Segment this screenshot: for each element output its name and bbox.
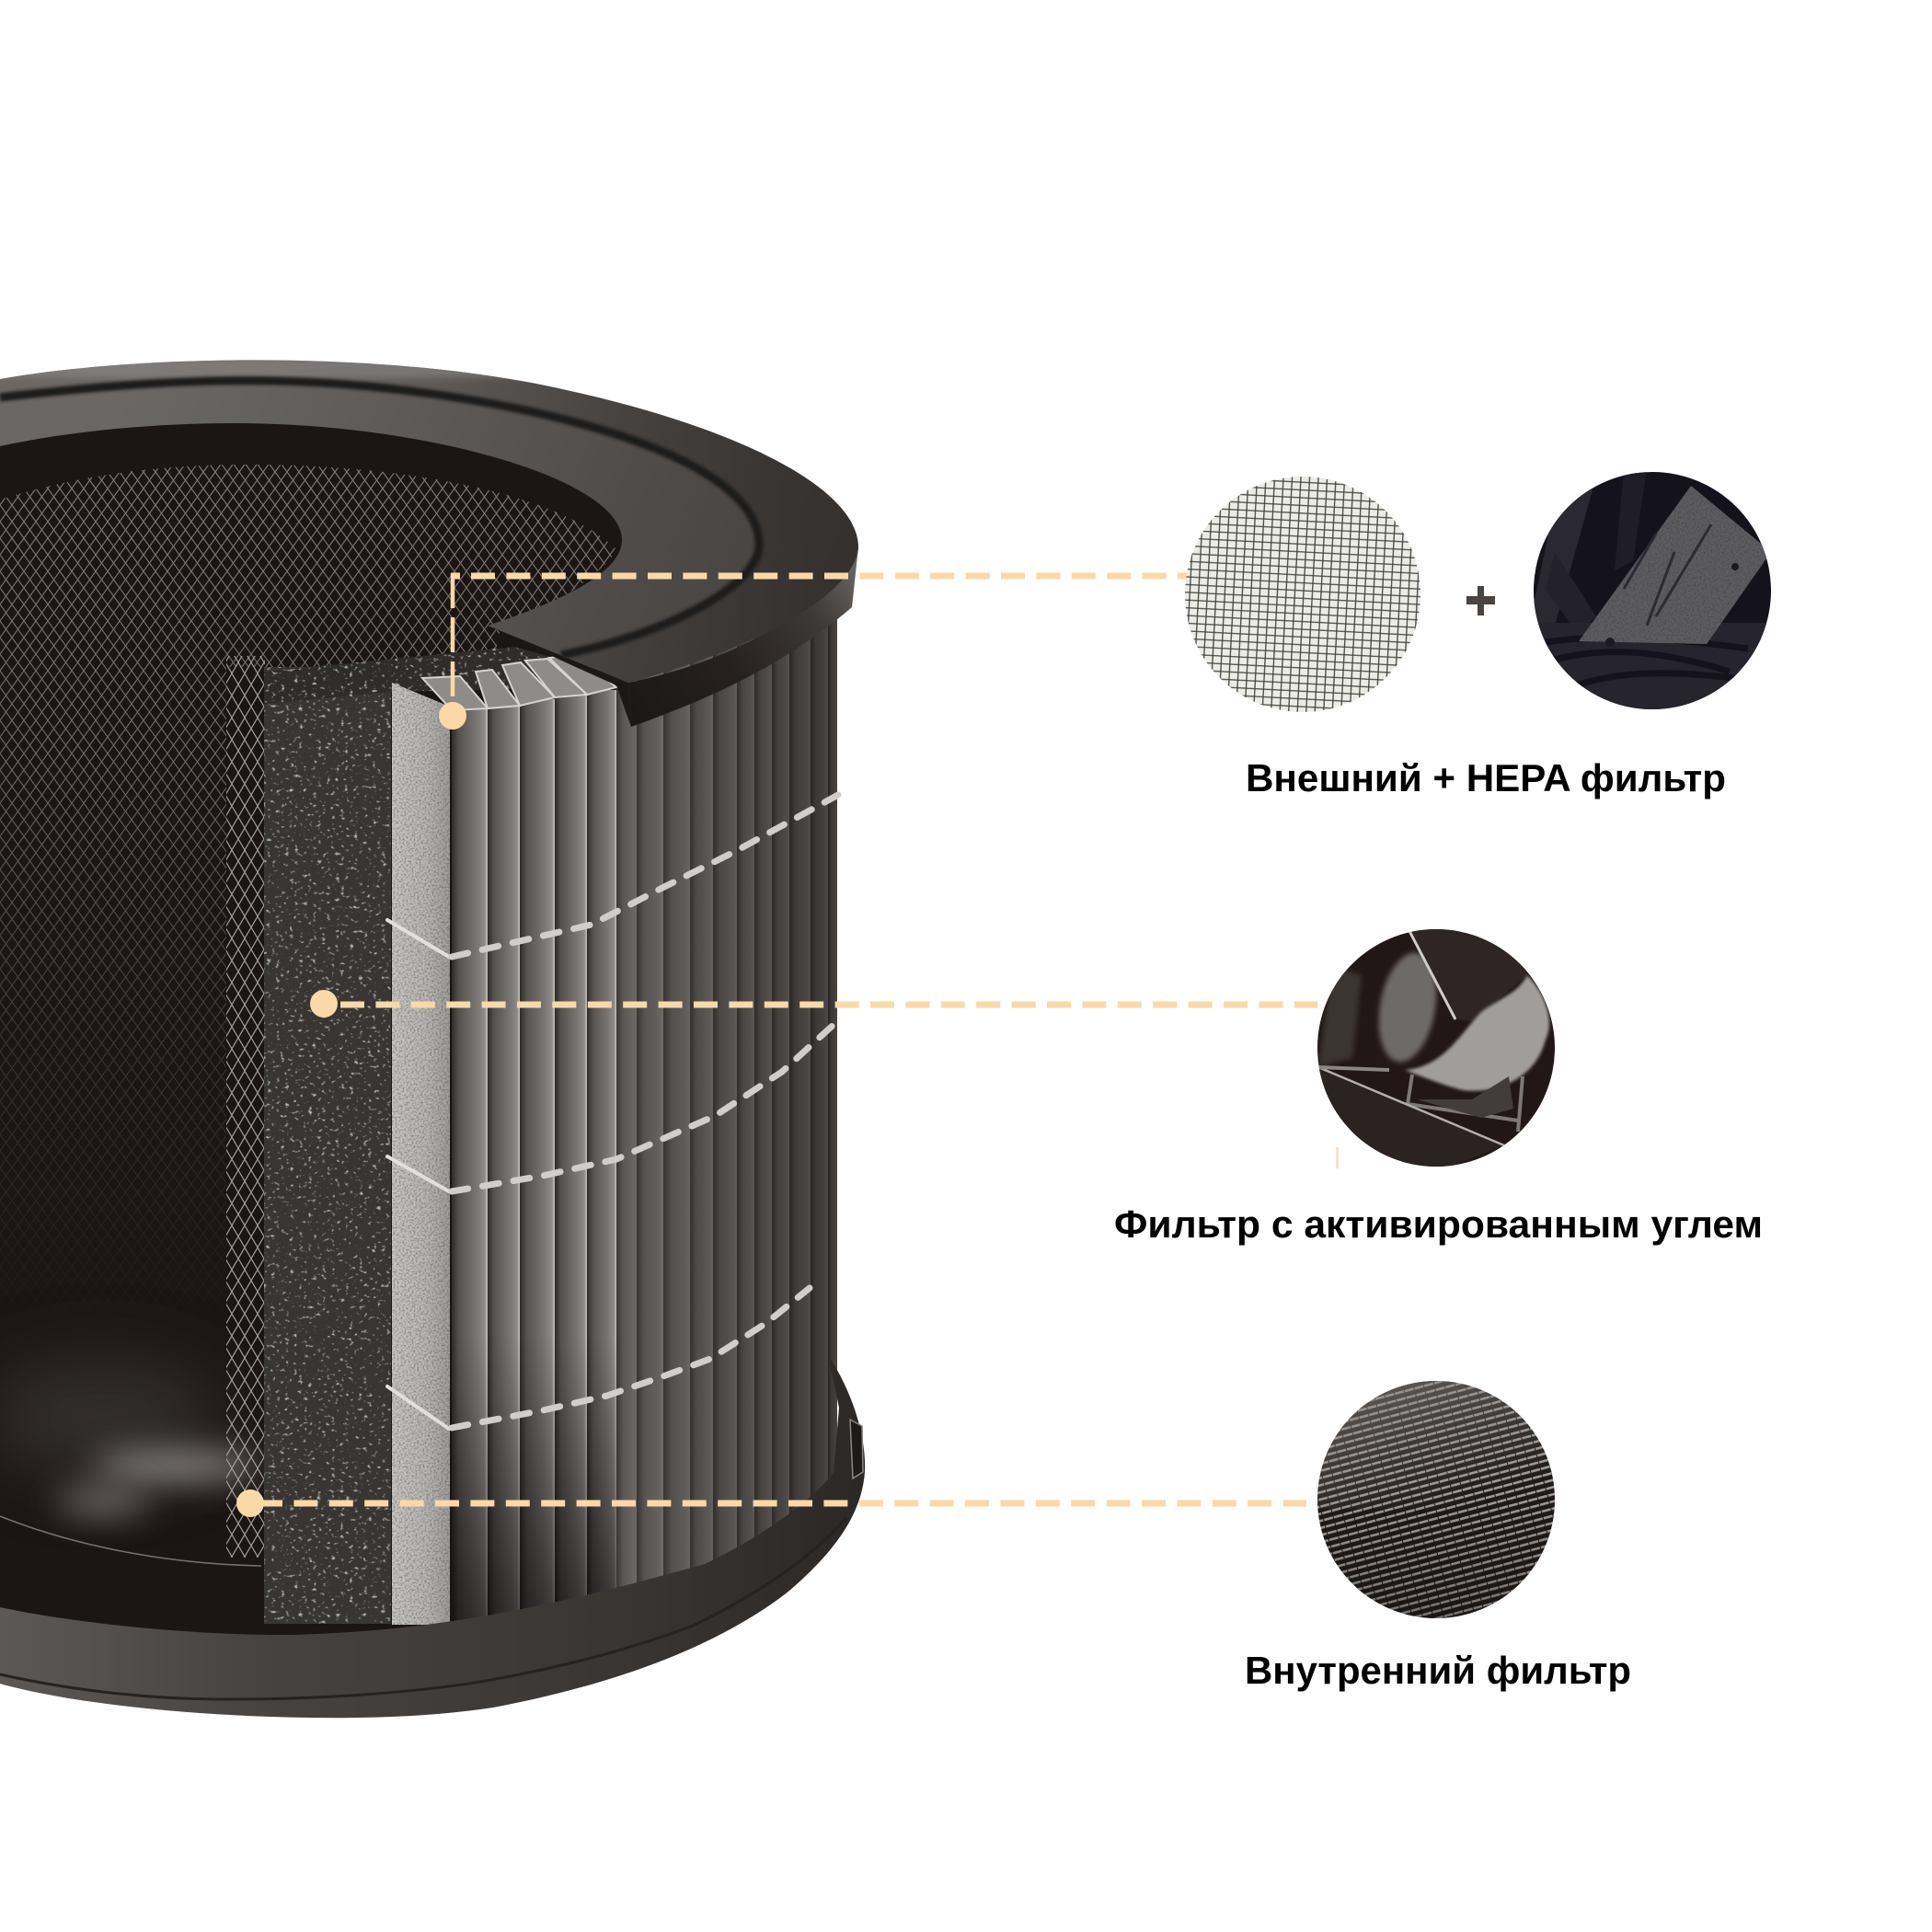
small stray tick [1336, 1147, 1339, 1168]
top cap side band [628, 547, 858, 727]
circle: inner filter swatch [1316, 1379, 1557, 1620]
pleat folds on top [422, 655, 616, 710]
bottom rim [0, 1355, 865, 1718]
callout line: activated carbon [310, 990, 1317, 1018]
label: outer + HEPA: Внешний + HEPA фильтр [1246, 756, 1726, 799]
top cap ring [0, 360, 858, 683]
cut face of the top cap [488, 626, 631, 727]
activated carbon foam layer [264, 647, 554, 1624]
callout line: inner filter [236, 1489, 1306, 1517]
rib threads [387, 795, 838, 1429]
outer pleats [616, 598, 837, 1638]
callout line: outer + HEPA [439, 573, 1187, 730]
plus sign [1466, 586, 1495, 615]
circle: HEPA fibres swatch [1534, 472, 1771, 709]
filter interior [0, 409, 635, 1638]
circle: outer mesh swatch [1185, 477, 1420, 712]
HEPA pleats section [422, 655, 616, 1633]
circle: activated carbon swatch [1316, 925, 1557, 1173]
label: inner filter: Внутренний фильтр [1245, 1649, 1631, 1692]
silver pleat face [392, 683, 450, 1625]
inner metal mesh strip [226, 656, 265, 1558]
illustration: cutaway filter cylinder [0, 350, 865, 1718]
label: activated carbon: Фильтр с активированным углем [1114, 1202, 1763, 1246]
